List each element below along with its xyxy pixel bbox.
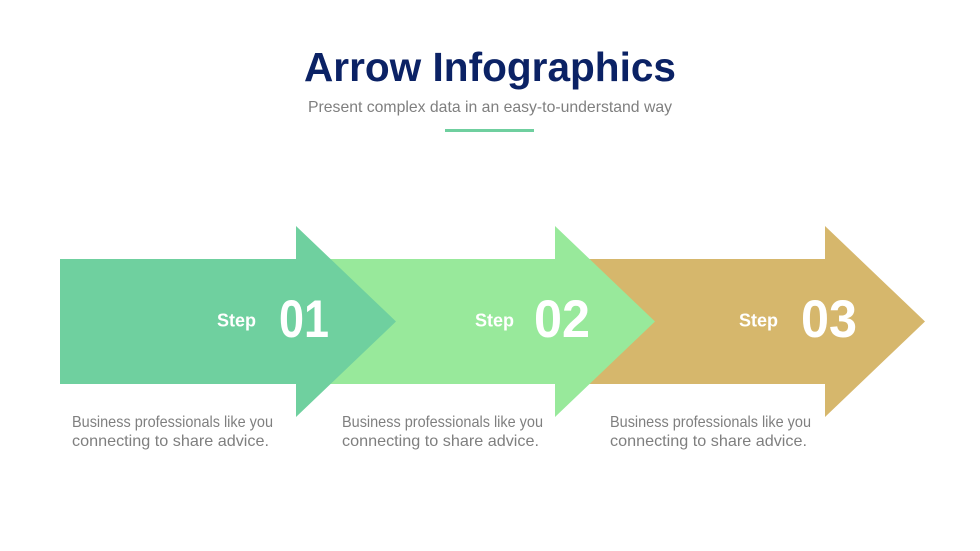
description 1: Business professionals like you [72, 414, 273, 431]
description 3: connecting to share advice. [610, 433, 807, 450]
arrow 1: green [60, 226, 396, 417]
arrow 3: tan [570, 226, 925, 417]
step 03 label: Step [739, 310, 778, 330]
description 2: Business professionals like you [342, 414, 543, 431]
arrow 2: light green [310, 226, 655, 417]
step 02 number: 02 [534, 290, 590, 349]
step 02 label: Step [475, 310, 514, 330]
step 01 label: Step [217, 310, 256, 330]
description 1: connecting to share advice. [72, 433, 269, 450]
subtitle: Present complex data in an easy-to-understand way [308, 99, 672, 116]
description 1 [72, 414, 273, 450]
description 3 [610, 414, 811, 450]
step 03 number: 03 [801, 290, 857, 349]
title: Arrow Infographics [304, 44, 676, 90]
description 2 [342, 414, 543, 450]
step 01 number: 01 [279, 290, 329, 349]
description 2: connecting to share advice. [342, 433, 539, 450]
title underline [445, 129, 534, 132]
description 3: Business professionals like you [610, 414, 811, 431]
